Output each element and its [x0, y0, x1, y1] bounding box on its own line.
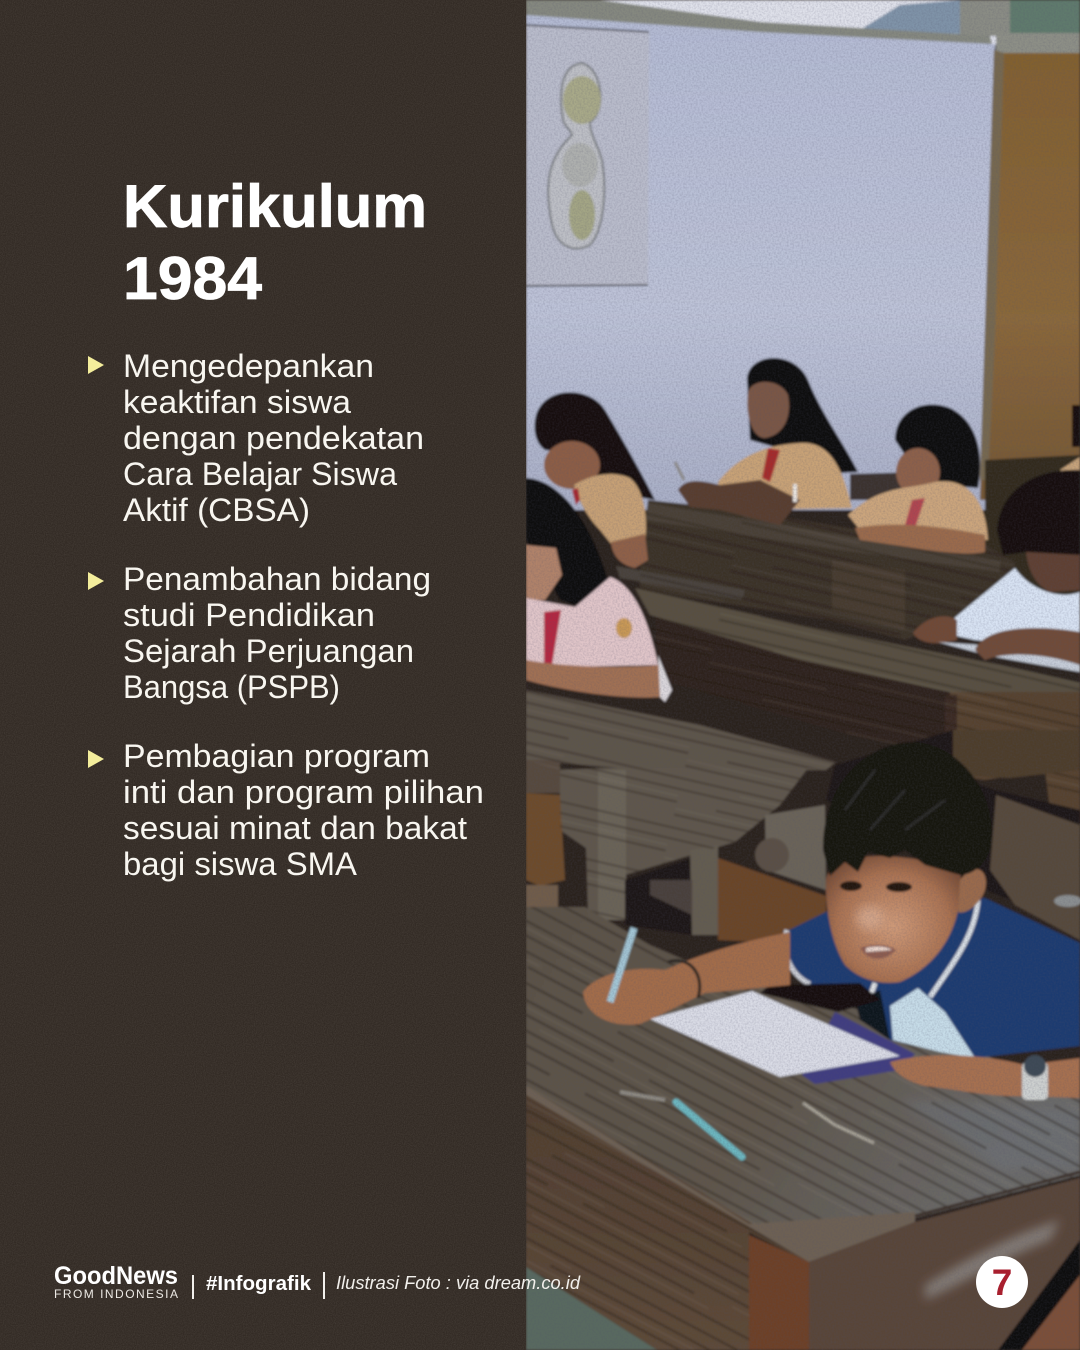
bullet: Penambahan bidang studi — [88, 561, 431, 705]
boy: shirt — [785, 898, 1080, 1058]
wall poster — [526, 25, 649, 286]
title — [123, 173, 427, 312]
wooden panel — [980, 53, 1080, 500]
photo: students in a classroom — [526, 0, 1080, 1350]
boy: paper and folder — [650, 983, 915, 1084]
back desk row — [616, 455, 1080, 640]
title: 1984 — [123, 245, 263, 312]
bullet: Penambahan bidang studi: Sejarah Perjuangan — [123, 633, 414, 669]
background bench and desks beside the boy — [718, 730, 1080, 945]
page number badge — [976, 1256, 1028, 1308]
title: Kurikulum — [123, 173, 427, 240]
bullet: Pembagian program: Pembagian program — [123, 738, 430, 774]
page number badge: 7 — [992, 1262, 1012, 1303]
logo: GoodNews from Indonesia — [54, 1262, 178, 1301]
student right edge — [913, 405, 1080, 672]
bullet: Pembagian program: bagi siswa SMA — [123, 846, 358, 882]
panel: dark text background — [0, 0, 526, 1350]
icon: bullet triangle — [88, 356, 104, 374]
bullet: Pembagian program: inti dan program pilihan — [123, 774, 484, 810]
logo: GoodNews from Indonesia: GoodNews — [54, 1262, 178, 1290]
sky and fence — [526, 0, 1080, 45]
desk details: pen and scratches — [620, 1092, 874, 1157]
bullet: Mengedepankan keaktifan siswa — [88, 348, 424, 528]
icon: bullet triangle — [88, 572, 104, 590]
girl back left — [535, 392, 655, 568]
photo credit: Ilustrasi Foto : via dream.co.id — [336, 1273, 581, 1293]
girl front left — [526, 478, 672, 702]
classroom wall — [526, 14, 995, 510]
second desk row — [635, 588, 1080, 810]
bullet: Mengedepankan keaktifan siswa: Mengedepankan — [123, 348, 374, 384]
bullet: Penambahan bidang studi: Penambahan bidang — [123, 561, 431, 597]
bullet: Pembagian program: sesuai minat dan bakat — [123, 810, 467, 846]
bullet: Mengedepankan keaktifan siswa: keaktifan siswa — [123, 384, 351, 420]
bullet: Penambahan bidang studi: Bangsa (PSPB) — [123, 669, 340, 705]
front desk — [526, 907, 1080, 1350]
logo: GoodNews from Indonesia: FROM INDONESIA — [54, 1287, 178, 1301]
bullet: Mengedepankan keaktifan siswa: dengan pendekatan — [123, 420, 424, 456]
hashtag: #Infografik — [206, 1273, 312, 1295]
bullet: Mengedepankan keaktifan siswa: Aktif (CBSA) — [123, 492, 310, 528]
bullet: Mengedepankan keaktifan siswa: Cara Belajar Siswa — [123, 456, 397, 492]
bullet: Pembagian program — [88, 738, 484, 882]
bullet: Penambahan bidang studi: studi Pendidikan — [123, 597, 375, 633]
girl back right — [848, 405, 988, 554]
middle left desk — [526, 690, 836, 935]
girl back centre — [675, 358, 858, 525]
footer — [54, 1262, 581, 1301]
boy: arms and hands — [583, 928, 1080, 1100]
boy: head and hair — [823, 742, 992, 983]
icon: bullet triangle — [88, 750, 104, 768]
